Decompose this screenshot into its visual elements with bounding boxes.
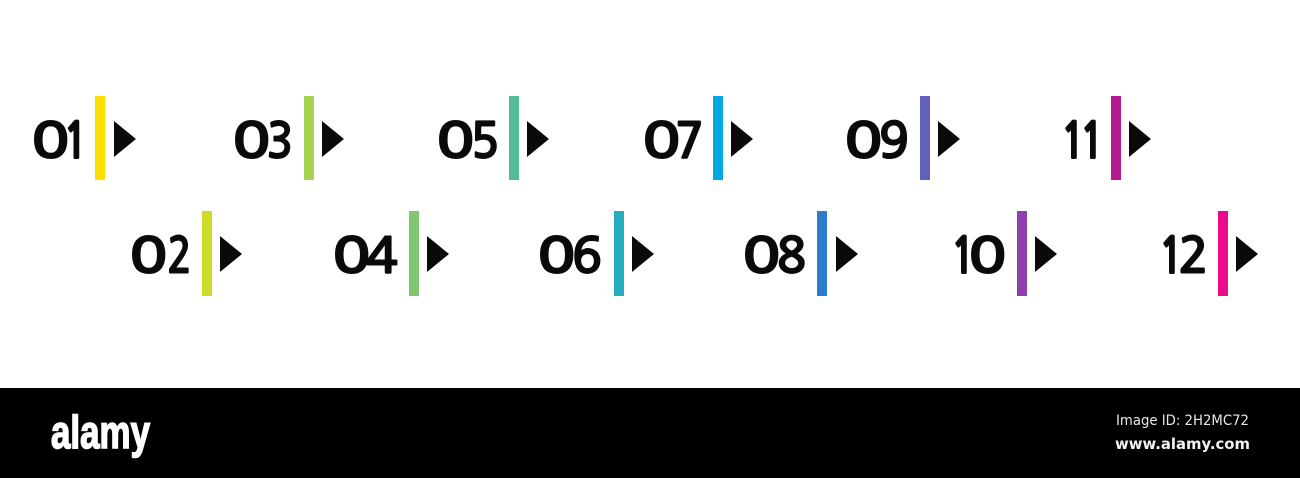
bullet 10 [951,211,1057,296]
bullet 10: 1 [951,233,975,281]
bullet 03 [232,96,344,180]
alamy logo: alamy [51,406,150,458]
bullet 03: 0 [232,118,271,166]
bullet 05: 0 [436,118,475,166]
bullet 11 [1061,96,1151,180]
bullet 06: 0 [537,233,576,281]
bullet 04 [332,211,449,296]
bullet 01 [31,96,136,180]
bullet 01: 0 [31,118,70,166]
bullet 02: 2 [167,233,192,281]
bullet 11: 1 [1080,118,1104,166]
image id: Image ID: 2H2MC72 [1116,413,1249,429]
bullet 04: 0 [332,233,371,281]
bullet 05 [436,96,549,180]
bullet 12: 1 [1159,233,1183,281]
bullet 02 [129,211,242,296]
bullet 08 [742,211,858,296]
bullet 06 [537,211,654,296]
bullet 05: 5 [470,118,500,166]
bullet 07: 0 [642,118,681,166]
bullet 02: 0 [129,233,168,281]
bullet 07 [642,96,753,180]
bullet 12: 2 [1178,233,1209,281]
footer band [0,388,1300,478]
website: www.alamy.com [1115,435,1250,453]
bullet 09: 0 [844,118,883,166]
bullet 10: 0 [968,233,1007,281]
bullet 09 [844,96,960,180]
bullet 03: 3 [266,118,294,166]
bullet 01: 1 [64,118,88,166]
bullet 06: 6 [572,233,602,281]
bullet 08: 8 [776,233,806,281]
bullet 11: 1 [1061,118,1085,166]
bullet 07: 7 [675,118,704,166]
bullet 08: 0 [742,233,781,281]
bullet 12 [1159,211,1258,296]
bullet 04: 4 [366,233,398,281]
bullet 09: 9 [878,118,910,166]
